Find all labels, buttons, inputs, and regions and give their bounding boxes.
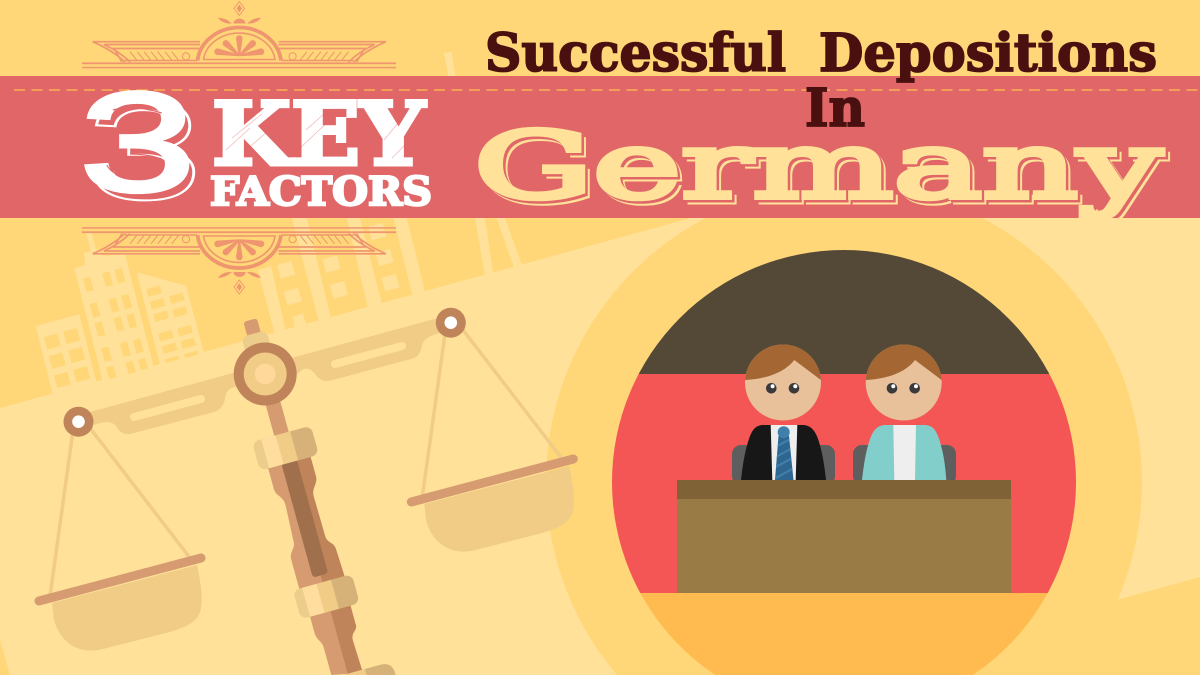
bottom band <box>343 662 396 675</box>
numeral 3 <box>79 63 203 230</box>
scales of justice <box>39 308 574 675</box>
right pan <box>411 329 574 552</box>
ornament left wing <box>93 42 200 62</box>
heading: Germany <box>478 126 1170 218</box>
chair <box>732 445 835 485</box>
top nub and collar <box>243 318 267 360</box>
building: large block stripes and windows <box>258 52 522 335</box>
flag stripe: black <box>638 250 1050 374</box>
beam slots <box>134 346 402 417</box>
handle <box>221 308 396 675</box>
eyes <box>766 383 799 394</box>
grip left half <box>266 461 348 675</box>
person: lawyer in black suit <box>732 344 835 485</box>
eyes <box>887 383 920 394</box>
lower band <box>293 574 360 619</box>
heading: Successful Depositions: Successful <box>485 23 786 84</box>
German flag circle <box>612 250 1076 675</box>
city skyline <box>36 52 522 397</box>
grip right half <box>289 455 370 674</box>
head <box>745 344 821 420</box>
heading: FACTORS: FACTORS <box>210 169 432 215</box>
numeral 3: 3 <box>79 63 196 222</box>
building: low block <box>36 314 97 397</box>
jacket <box>862 425 946 480</box>
building: sloped roof block <box>137 272 204 365</box>
chair <box>853 445 956 485</box>
dark inlay <box>281 457 328 578</box>
pivot <box>234 342 297 406</box>
numeral 3: 3 <box>86 71 203 230</box>
ornament base rules <box>82 62 396 68</box>
table top <box>677 480 1011 499</box>
bottom ornament <box>82 227 396 294</box>
heading: In: In <box>805 78 865 139</box>
shirt <box>771 425 797 480</box>
ornament right wing <box>279 42 386 62</box>
left pan <box>39 428 202 651</box>
heading: Germany: Germany <box>474 112 1162 220</box>
right ring <box>436 308 466 338</box>
head <box>866 344 942 420</box>
flag stripe: gold <box>640 593 1048 675</box>
ornament dome <box>198 28 281 61</box>
heading: Successful Depositions <box>485 23 1157 84</box>
table front <box>677 499 1011 593</box>
table <box>677 480 1011 593</box>
hair <box>745 344 821 380</box>
left ring <box>64 407 94 437</box>
heading: Germany: Germany <box>476 115 1165 222</box>
top ornament <box>82 2 396 68</box>
tie <box>775 426 794 480</box>
dashed stitching <box>14 89 1200 91</box>
person: witness in teal jacket <box>853 344 956 485</box>
shirt <box>893 425 916 480</box>
neck <box>258 372 290 440</box>
large yellow circle <box>546 184 1142 675</box>
ornament rays <box>214 35 265 59</box>
ornament crest <box>218 2 261 24</box>
heading: Successful Depositions: Depositions <box>819 23 1157 84</box>
suit jacket <box>741 425 826 480</box>
building: tall tower with antenna <box>74 232 154 382</box>
upper band <box>252 426 319 471</box>
hair <box>866 344 942 380</box>
red banner <box>0 76 1200 218</box>
beam <box>90 318 440 434</box>
heading: KEY: KEY <box>212 82 426 186</box>
flag stripe: red <box>612 374 1076 593</box>
heading: Germany: Germany <box>478 117 1167 224</box>
